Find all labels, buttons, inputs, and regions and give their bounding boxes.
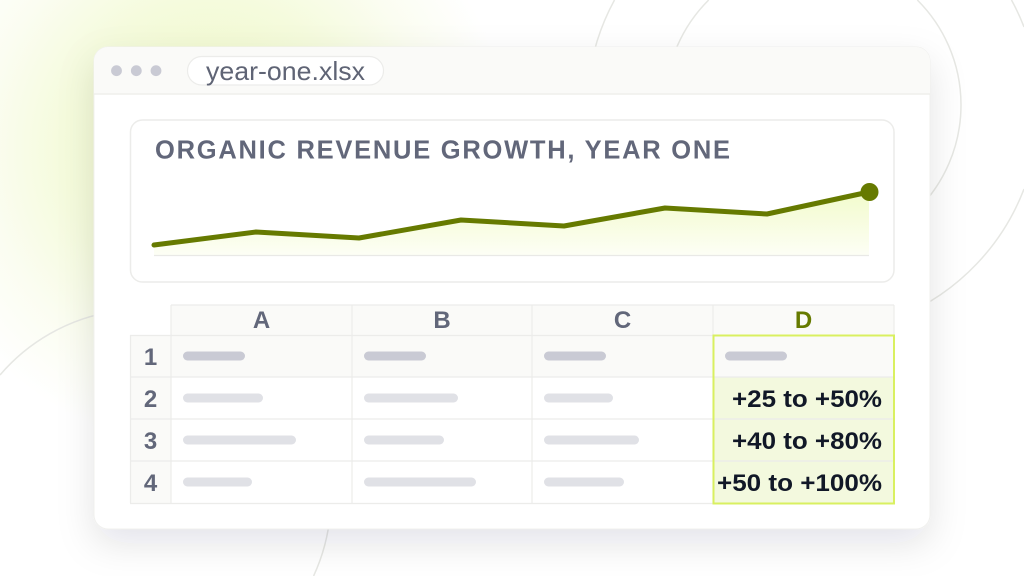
icon: window control dots <box>111 65 161 76</box>
row headers: 2 <box>144 386 157 413</box>
growth values: +25 to +50% <box>732 386 882 413</box>
growth values: +50 to +100% <box>717 470 882 497</box>
panel: spreadsheet window <box>94 47 930 529</box>
row headers: 3 <box>144 428 157 455</box>
growth values: +40 to +80% <box>732 428 882 455</box>
row headers: 4 <box>144 470 158 497</box>
column headers: C <box>614 307 631 334</box>
window title bar <box>94 47 930 94</box>
placeholder data bars <box>183 394 639 486</box>
panel: revenue chart <box>130 120 894 282</box>
row headers: 1 <box>144 344 157 371</box>
column headers <box>253 307 812 334</box>
growth values <box>717 386 882 497</box>
column headers: D <box>795 307 812 334</box>
table grid <box>130 305 894 504</box>
column headers: B <box>433 307 451 334</box>
highlighted column D <box>714 336 894 504</box>
row headers <box>144 344 158 497</box>
file name tab: year-one.xlsx <box>206 56 365 86</box>
chart heading: ORGANIC REVENUE GROWTH, YEAR ONE <box>155 136 730 164</box>
column headers: A <box>253 307 270 334</box>
line chart <box>154 183 878 256</box>
panel: data table <box>130 305 894 504</box>
table fills <box>130 305 894 503</box>
placeholder header bars <box>183 352 787 360</box>
